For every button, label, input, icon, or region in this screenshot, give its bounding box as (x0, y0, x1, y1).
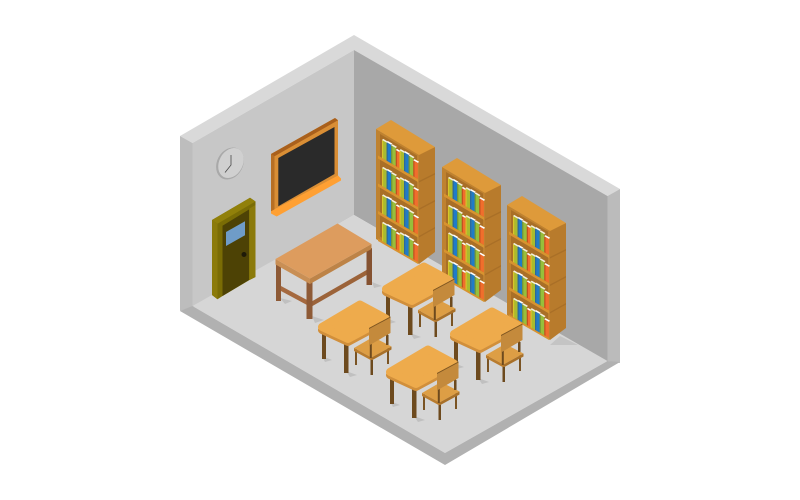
student desk and chair, left (322, 304, 392, 377)
teacher's table (276, 224, 382, 323)
bookcase 2 (442, 158, 501, 302)
bookcase 3 (507, 196, 566, 340)
blackboard (271, 118, 341, 216)
back left wall (192, 50, 354, 308)
student desk and chair, front (390, 350, 460, 422)
door knob (242, 252, 246, 257)
door (212, 198, 256, 299)
right wall end (608, 189, 620, 363)
top edge of walls (180, 35, 620, 196)
back right wall (354, 50, 608, 362)
bookcase 1 (376, 120, 435, 264)
student desk and chair, right (454, 312, 524, 384)
floor (192, 215, 608, 453)
left wall end (180, 136, 192, 311)
chalk tray (271, 176, 341, 216)
room shell (180, 35, 620, 465)
student desk and chair, back (386, 266, 456, 339)
floor front edge (180, 306, 620, 465)
wall clock (211, 143, 249, 184)
door window (226, 221, 245, 246)
bookcase shadow on floor (550, 336, 578, 345)
